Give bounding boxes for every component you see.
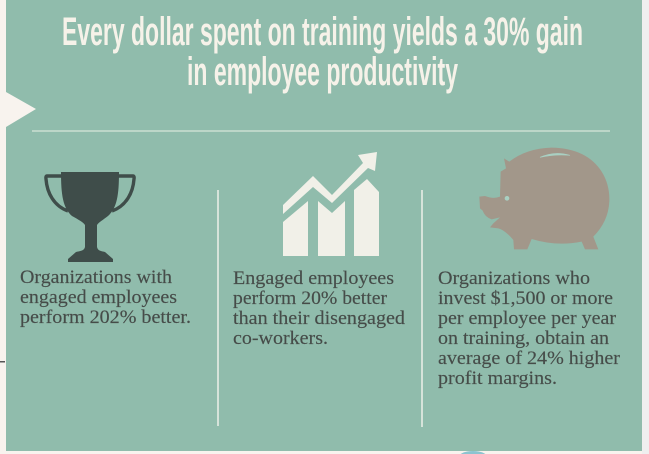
text: engaged employees perform better: Engaged employees [233,268,394,289]
text: organizations with engaged employees: Organizations with [20,267,173,288]
text: engaged employees perform better: perform 20% better [233,288,388,309]
text: organizations with engaged employees: engaged employees [20,287,177,308]
icon: trophy [46,172,134,262]
text: organizations with engaged employees [20,267,191,328]
title: in employee productivity [187,50,458,94]
text: organizations with engaged employees: perform 202% better. [20,307,191,328]
icon: cropped blue circle [458,451,488,454]
text: organizations who invest: Organizations who [438,268,590,289]
title [62,10,583,94]
text: organizations who invest [438,268,621,389]
arrow: side marker [6,92,36,127]
text: organizations who invest: per employee per year [438,308,617,329]
icon: bar chart with rising arrow [283,152,379,256]
text: engaged employees perform better [233,268,406,349]
text: engaged employees perform better: than their disengaged [233,308,406,329]
icon: piggy bank [479,148,609,249]
text: engaged employees perform better: co-workers. [233,328,328,349]
text: organizations who invest: average of 24% higher [438,348,621,369]
text: organizations who invest: on training, obtain an [438,328,610,349]
text: organizations who invest: invest $1,500 or more [438,288,613,309]
text: organizations who invest: profit margins. [438,368,557,389]
